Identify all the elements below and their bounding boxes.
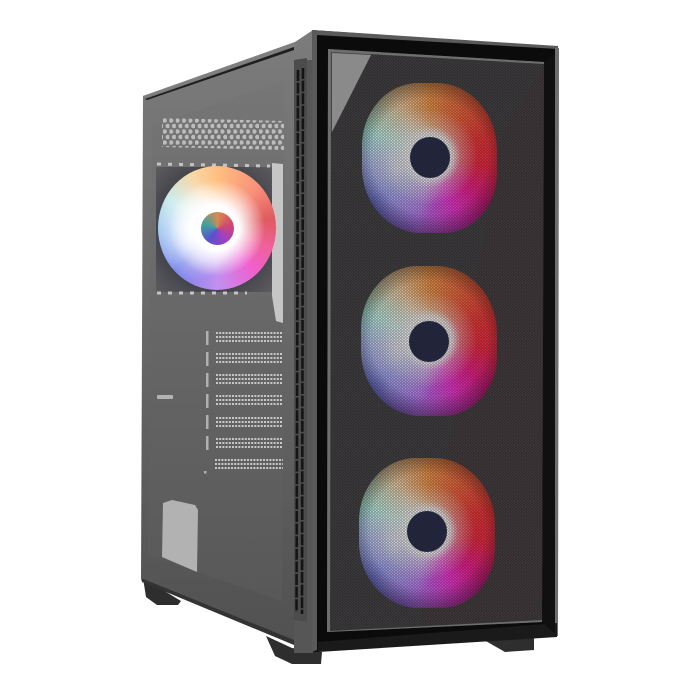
front fan 1 [362, 83, 497, 233]
white rear strip [272, 163, 283, 323]
dotted mounting rows [157, 164, 270, 293]
small bar [157, 395, 173, 399]
corner triangle [332, 53, 371, 132]
slot brackets [204, 331, 208, 474]
rear fan [158, 166, 276, 290]
mesh backing [327, 49, 544, 632]
feet [143, 578, 534, 664]
expansion slots [215, 333, 283, 468]
psu opening [162, 500, 198, 572]
glass pane [148, 81, 284, 601]
front fan 2 [361, 266, 497, 416]
lower mesh reflection [420, 64, 544, 625]
rear fan dark housing [156, 167, 272, 292]
top perforation [162, 118, 284, 150]
front frame [312, 30, 559, 652]
edge strip [294, 60, 313, 653]
side panel [141, 30, 313, 653]
front fan 3 [359, 458, 495, 608]
vent slots [296, 68, 303, 614]
dark base trim [141, 578, 294, 645]
